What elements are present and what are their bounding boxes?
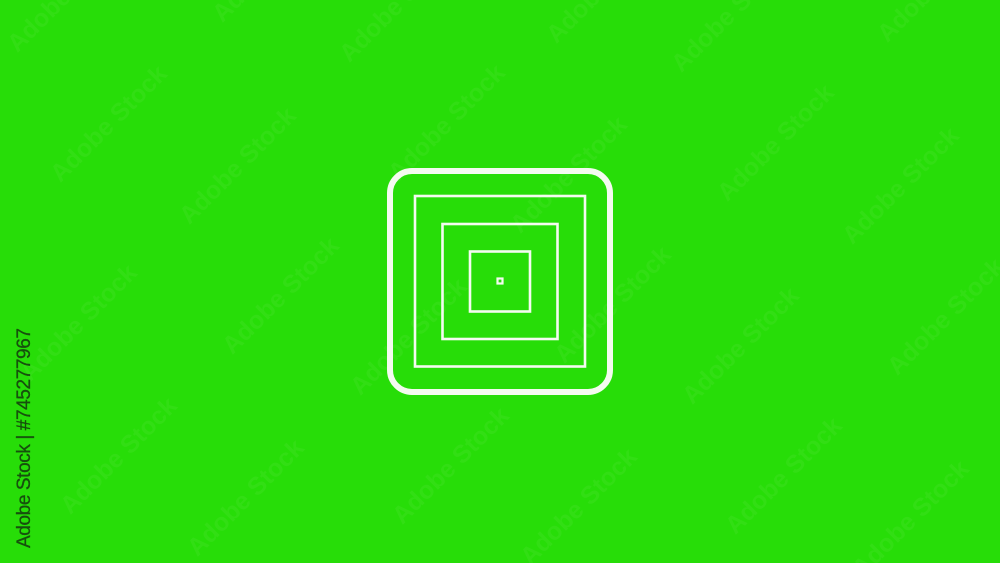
watermark pattern: Adobe Stock [45,60,173,188]
watermark pattern: Adobe Stock [677,282,805,410]
third square [442,224,558,339]
outer rounded square [390,171,610,392]
watermark pattern: Adobe Stock [387,402,515,530]
watermark pattern: Adobe Stock [182,434,310,562]
vertical stock id label: Adobe Stock | #745277967 [14,328,35,548]
second square [415,196,585,366]
center square [498,278,502,284]
watermark pattern: Adobe Stock [174,102,302,230]
watermark pattern: Adobe Stock [720,412,848,540]
watermark pattern: Adobe Stock [55,392,183,520]
watermark pattern: Adobe Stock [345,273,473,401]
watermark pattern: Adobe Stock [549,241,677,369]
watermark pattern: Adobe Stock [217,232,345,360]
watermark pattern: Adobe Stock [837,122,965,250]
fourth square [470,252,530,312]
watermark pattern: Adobe Stock [712,79,840,207]
icon: concentric squares [390,171,610,392]
watermark pattern: Adobe Stock [15,259,143,387]
watermark pattern: Adobe Stock [505,111,633,239]
watermark pattern: Adobe Stock [383,59,511,187]
